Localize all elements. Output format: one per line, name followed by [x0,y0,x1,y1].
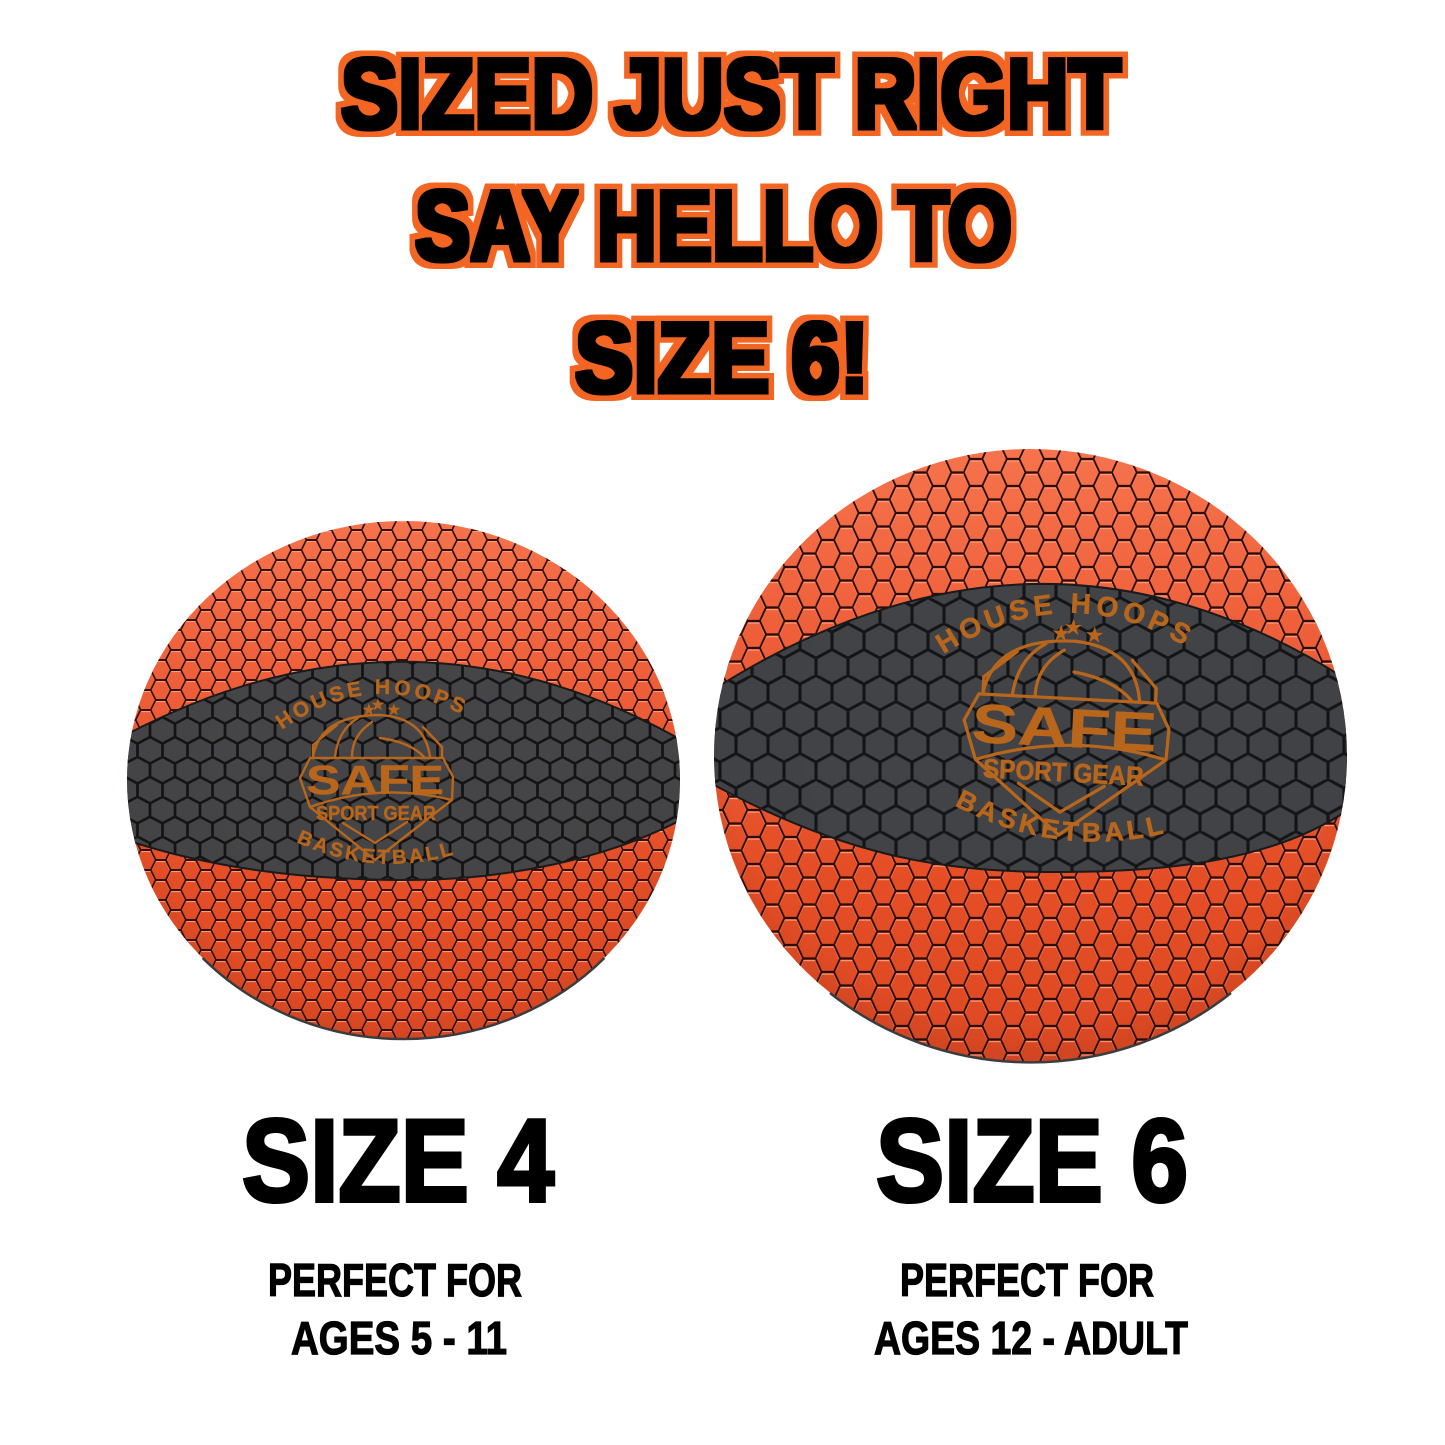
base rim: size 6 [830,993,1231,1062]
size 6 basketball [714,449,1347,1064]
embroidered logo: size 4: SAFE [306,757,444,803]
embroidered logo: size 4: ★ [363,702,375,717]
embroidered logo: size 6: ★ [1053,623,1070,644]
embroidered logo: size 6 [934,593,1190,842]
size 4 description [268,1254,522,1364]
size 4 label: SIZE 4 [242,1095,554,1226]
size 6 description: PERFECT FOR [900,1254,1154,1306]
embroidered logo: size 4: SPORT GEAR [316,803,436,825]
embroidered logo: size 6: SAFE [970,692,1158,763]
size 6 label: SIZE 6 [876,1095,1188,1226]
dark centre band [120,662,690,880]
size 6 description: AGES 12 - ADULT [874,1312,1188,1364]
embroidered logo: size 4: ★ [388,702,400,717]
dark centre band [705,584,1355,872]
embroidered logo: size 6: ★ [1086,624,1103,645]
embroidered logo: size 6: HOUSE HOOPS [934,593,1190,654]
embroidered logo: size 6: ★ [1065,617,1082,637]
embroidered logo: size 4 [274,679,466,864]
title [341,38,1121,413]
size 4 basketball [127,521,680,1040]
size 6 description [874,1254,1188,1364]
embroidered logo: size 4: BASKETBALL [297,830,454,864]
title: SAY HELLO TO [415,170,1012,281]
embroidered logo: size 6: SPORT GEAR [982,753,1144,792]
title: SIZE 6! [575,302,869,413]
title: SIZED JUST RIGHT [341,38,1121,149]
base rim: size 4 [203,958,604,1039]
embroidered logo: size 4: ★ [372,697,384,712]
size 4 description: PERFECT FOR [268,1254,522,1306]
embroidered logo: size 4: HOUSE HOOPS [274,679,466,730]
embroidered logo: size 6: BASKETBALL [956,789,1164,842]
size 4 description: AGES 5 - 11 [291,1312,507,1364]
